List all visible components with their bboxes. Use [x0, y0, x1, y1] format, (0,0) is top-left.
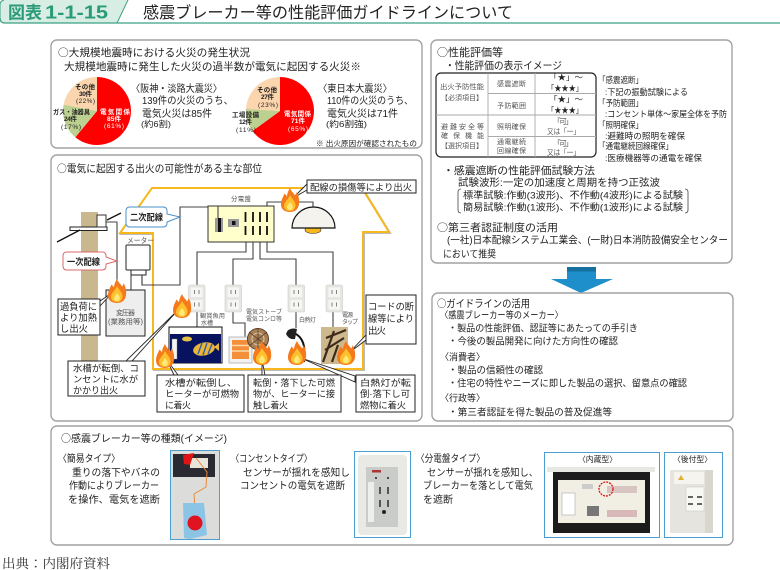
third party certification text: (一社)日本配線システム工業会、(一財)日本消防設備安全センター	[447, 234, 728, 246]
callout: cord break	[366, 295, 416, 344]
pie chart: Hanshin-Awaji: 85件	[107, 114, 122, 123]
panel subheading: 大規模地震時に発生した火災の過半数が電気に起因する火災※	[64, 60, 361, 73]
subheading: ・性能評価の表示イメージ	[445, 59, 562, 72]
pie chart: Great East Japan: (65%)	[288, 126, 308, 133]
rating notes: :避難時の照明を確保	[605, 131, 685, 141]
meter	[126, 236, 154, 290]
guideline text: 〈感震ブレーカー等のメーカー〉	[440, 310, 563, 322]
callout: secondary wiring: 二次配線	[130, 212, 163, 222]
photo: retrofit type	[664, 452, 722, 538]
guideline text: ・住宅の特性やニーズに即した製品の選択、留意点の確認	[448, 378, 687, 390]
panel heading: ○電気に起因する出火の可能性がある主な部位	[57, 161, 262, 176]
callout: primary wiring: 一次配線	[67, 256, 100, 267]
panel: fire occurrence in major earthquakes	[51, 40, 422, 148]
transformer	[106, 290, 145, 336]
callout: primary wiring	[63, 252, 117, 270]
photo: built-in type	[544, 452, 660, 538]
footnote: ※ 出火原因が確認されたもの	[316, 138, 417, 148]
arrow: down	[551, 267, 613, 293]
guideline text: ・第三者認証を得た製品の普及促進等	[448, 406, 612, 418]
guideline text: ・製品の信頼性の確認	[448, 364, 543, 376]
appliance labels: 電気ストーブ	[246, 308, 282, 316]
callout: wiring damage	[307, 180, 416, 193]
callout: aquarium water: かかり出火	[73, 384, 118, 396]
pie chart: Great East Japan: 12件	[239, 117, 252, 126]
transformer: (業務用等)	[108, 317, 143, 326]
test method text: ・感震遮断の性能評価試験方法	[443, 164, 596, 177]
callout: aquarium heater	[157, 375, 244, 412]
rating table: 又は「一」	[547, 127, 580, 136]
rating table: 【必須項目】	[441, 93, 483, 102]
rating table: 「★★★」	[547, 84, 583, 93]
pie chart: Hanshin-Awaji: 電気関係	[100, 107, 130, 116]
test method text: 試験波形:一定の加速度と周期を持つ正弦波	[458, 176, 660, 189]
pie chart: Great East Japan: 27件	[261, 92, 274, 101]
appliance labels: 白熱灯	[299, 316, 316, 324]
rating table: 「★★★」	[547, 106, 583, 115]
stove and heater	[229, 328, 268, 363]
panel: possible ignition locations	[51, 155, 422, 421]
rating table: 照明確保	[497, 122, 526, 131]
guideline text: ・今後の製品開発に向けた方向性の確認	[448, 336, 618, 348]
text: outlet type: 〈コンセントタイプ〉	[231, 453, 312, 465]
house outline	[120, 188, 389, 369]
appliance labels: タップ	[342, 318, 358, 326]
text: panel type: 〈分電盤タイプ〉	[416, 452, 485, 465]
rating table: 「★」〜	[549, 73, 583, 82]
flames	[108, 188, 355, 368]
rating table: 回線確保	[497, 146, 526, 155]
appliance labels: 観賞魚用	[200, 312, 225, 320]
callout: overload: 過負荷に	[60, 301, 97, 313]
rating table: 「可」	[553, 117, 573, 126]
panel heading: ○性能評価等	[437, 44, 503, 60]
desk lamp	[286, 329, 305, 362]
text: simple type: 作動によりブレーカー	[69, 479, 159, 492]
rating table: 出火予防性能	[440, 82, 484, 91]
rating notes: :コンセント単体〜家屋全体を予防	[605, 109, 727, 119]
meter: メーター	[127, 236, 154, 245]
test method text: 簡易試験:作動(1波形)、不作動(1波形)による試験	[463, 202, 684, 214]
panel: performance evaluation	[431, 40, 732, 263]
rating table: 確保機能	[441, 131, 484, 140]
callout: wiring damage: 配線の損傷等により出火	[310, 182, 412, 192]
text: Hanshin-Awaji: 139件の火災のうち、	[142, 95, 233, 107]
text: simple type: 重りの落下やバネの	[72, 466, 160, 479]
rating table: 又は「一」	[547, 148, 580, 157]
text: Great East Japan: 110件の火災のうち、	[327, 95, 413, 107]
guideline text	[437, 296, 687, 418]
pie chart: Great East Japan: その他	[257, 85, 278, 94]
callout: fallen combustibles: 物が、ヒーターに接	[253, 388, 335, 399]
header tab: figure number	[0, 0, 780, 23]
callout: overload: し出火	[60, 323, 88, 335]
rating table: 予防範囲	[497, 101, 526, 110]
text: panel type	[416, 452, 538, 506]
rating notes: :医療機器等の通電を確保	[605, 153, 702, 163]
callout: aquarium heater: に着火	[165, 400, 191, 410]
callout: aquarium water: 水槽が転倒、コ	[73, 362, 139, 374]
pie chart: Great East Japan	[232, 77, 314, 145]
pie chart: Hanshin-Awaji: (61%)	[104, 123, 124, 130]
pie chart: Great East Japan: (11%)	[236, 127, 256, 134]
rating table: 「可」	[553, 139, 573, 148]
aquarium	[169, 327, 222, 363]
rating table: 通電継続	[497, 137, 526, 146]
pie chart: Hanshin-Awaji	[53, 77, 131, 145]
rating table	[436, 73, 596, 157]
callout: aquarium water: ンセントに水が	[73, 374, 138, 384]
text: Hanshin-Awaji: 〈阪神・淡路大震災〉	[131, 82, 222, 95]
third party certification text: において推奨	[443, 248, 496, 260]
test method text	[443, 164, 688, 214]
text: simple type: 〈簡易タイプ〉	[58, 452, 120, 465]
distribution board: 分電盤	[231, 194, 252, 203]
panel heading: ○感震ブレーカー等の種類(イメージ)	[61, 430, 227, 445]
callout: cord break: 線等により	[368, 313, 414, 325]
guideline text: 〈行政等〉	[440, 392, 485, 404]
rating table: 避難安全等	[441, 122, 484, 131]
pie chart: Hanshin-Awaji: その他	[75, 82, 96, 91]
panel: guideline usage	[432, 293, 733, 421]
pie chart: Hanshin-Awaji: (17%)	[61, 124, 81, 131]
rating notes: 「照明確保」	[598, 120, 643, 130]
callout: aquarium heater: 水槽が転倒し、	[165, 377, 237, 388]
pie chart: Great East Japan: (23%)	[258, 102, 278, 109]
rating table: 感震遮断	[497, 79, 526, 88]
rating notes: 「通電継続回線確保」	[598, 141, 673, 151]
photo: simple type	[170, 450, 220, 540]
third party certification text	[437, 220, 728, 260]
pie chart: Great East Japan: 71件	[291, 116, 306, 125]
callout: overload: より加熱	[60, 312, 97, 324]
callout: fallen combustibles: 触し着火	[253, 400, 288, 410]
appliance labels	[200, 308, 358, 327]
callout: aquarium heater: ヒーターが可燃物	[165, 388, 239, 399]
callout: incandescent lamp: 白熱灯が転	[360, 377, 411, 388]
pie chart: Hanshin-Awaji: 24件	[64, 114, 78, 123]
text: Great East Japan	[318, 82, 413, 129]
wall outlets	[188, 285, 342, 312]
appliance labels: 電気コンロ等	[246, 315, 282, 323]
header tab: figure number: 図表	[8, 4, 42, 22]
ceiling lamp	[292, 207, 335, 234]
rating table: 「★」〜	[549, 95, 583, 104]
appliance labels: 電源	[342, 311, 353, 319]
pie chart: Great East Japan: 電気関係	[284, 109, 312, 118]
photo: outlet type	[354, 452, 410, 538]
pie chart: Hanshin-Awaji: ガス・油器具	[53, 107, 90, 116]
appliance labels: 水槽	[201, 319, 213, 327]
text: Hanshin-Awaji: 電気火災は85件	[142, 107, 212, 120]
third party certification text: ○第三者認証制度の活用	[437, 220, 558, 235]
rating notes: 「感震遮断」	[598, 75, 643, 85]
text: Hanshin-Awaji: (約6割)	[141, 119, 171, 129]
panel: types of seismic breakers	[51, 426, 733, 545]
rating notes: :下記の振動試験による	[605, 87, 688, 97]
text: outlet type: センサーが揺れを感知し	[243, 466, 350, 479]
transformer: 変圧器	[116, 308, 135, 317]
text: panel type: センサーが揺れを感知し、	[427, 466, 538, 479]
photo: built-in type: 〈内蔵型〉	[578, 454, 617, 464]
callout: cord break: 出火	[368, 325, 386, 337]
utility pole	[57, 212, 121, 364]
guideline text: 〈消費者〉	[440, 352, 485, 364]
wiring	[106, 202, 333, 337]
panel heading: ○大規模地震時における火災の発生状況	[58, 45, 251, 60]
header tab: figure number: 1-1-15	[45, 2, 108, 22]
guideline text: ・製品の性能評価、認証等にあたっての手引き	[448, 322, 638, 334]
rating notes: 「予防範囲」	[598, 98, 643, 108]
test method text: 標準試験:作動(3波形)、不作動(4波形)による試験	[463, 190, 684, 202]
text: outlet type: コンセントの電気を遮断	[240, 479, 345, 492]
callout: incandescent lamp	[356, 375, 415, 412]
text: Great East Japan: 〈東日本大震災〉	[318, 82, 392, 95]
pie chart: Hanshin-Awaji: 30件	[79, 89, 92, 98]
text: Great East Japan: 電気火災は71件	[327, 107, 398, 120]
title: 感震ブレーカー等の性能評価ガイドラインについて	[143, 3, 513, 22]
callout: secondary wiring	[126, 207, 180, 227]
guideline text: ○ガイドラインの活用	[437, 296, 530, 311]
connector lines from flames to callouts	[100, 184, 366, 382]
photo: retrofit type: 〈後付型〉	[673, 454, 712, 464]
callout: cord break: コードの断	[368, 301, 414, 313]
rating table: 【選択項目】	[441, 141, 483, 150]
text: simple type: を操作、電気を遮断	[68, 493, 160, 506]
callout: incandescent lamp: 燃物に着火	[360, 400, 406, 410]
callout: aquarium water	[68, 361, 145, 396]
power strip picture	[321, 327, 348, 364]
callout: fallen combustibles	[248, 375, 341, 412]
callout: overload	[58, 299, 100, 335]
text: Great East Japan: (約6割強)	[326, 119, 367, 129]
pie chart: Great East Japan: 工場設備	[232, 110, 260, 119]
text: panel type: を遮断	[423, 493, 453, 506]
distribution board	[208, 194, 274, 242]
callout: fallen combustibles: 転倒・落下した可燃	[253, 377, 335, 388]
rating notes	[598, 75, 727, 163]
pie chart: Hanshin-Awaji: (22%)	[76, 98, 95, 105]
text: panel type: ブレーカーを落として電気	[423, 479, 533, 492]
callout: incandescent lamp: 倒·落下し可	[360, 388, 410, 399]
text: simple type	[58, 452, 160, 506]
text: Hanshin-Awaji	[131, 82, 233, 129]
text: outlet type	[231, 453, 350, 492]
